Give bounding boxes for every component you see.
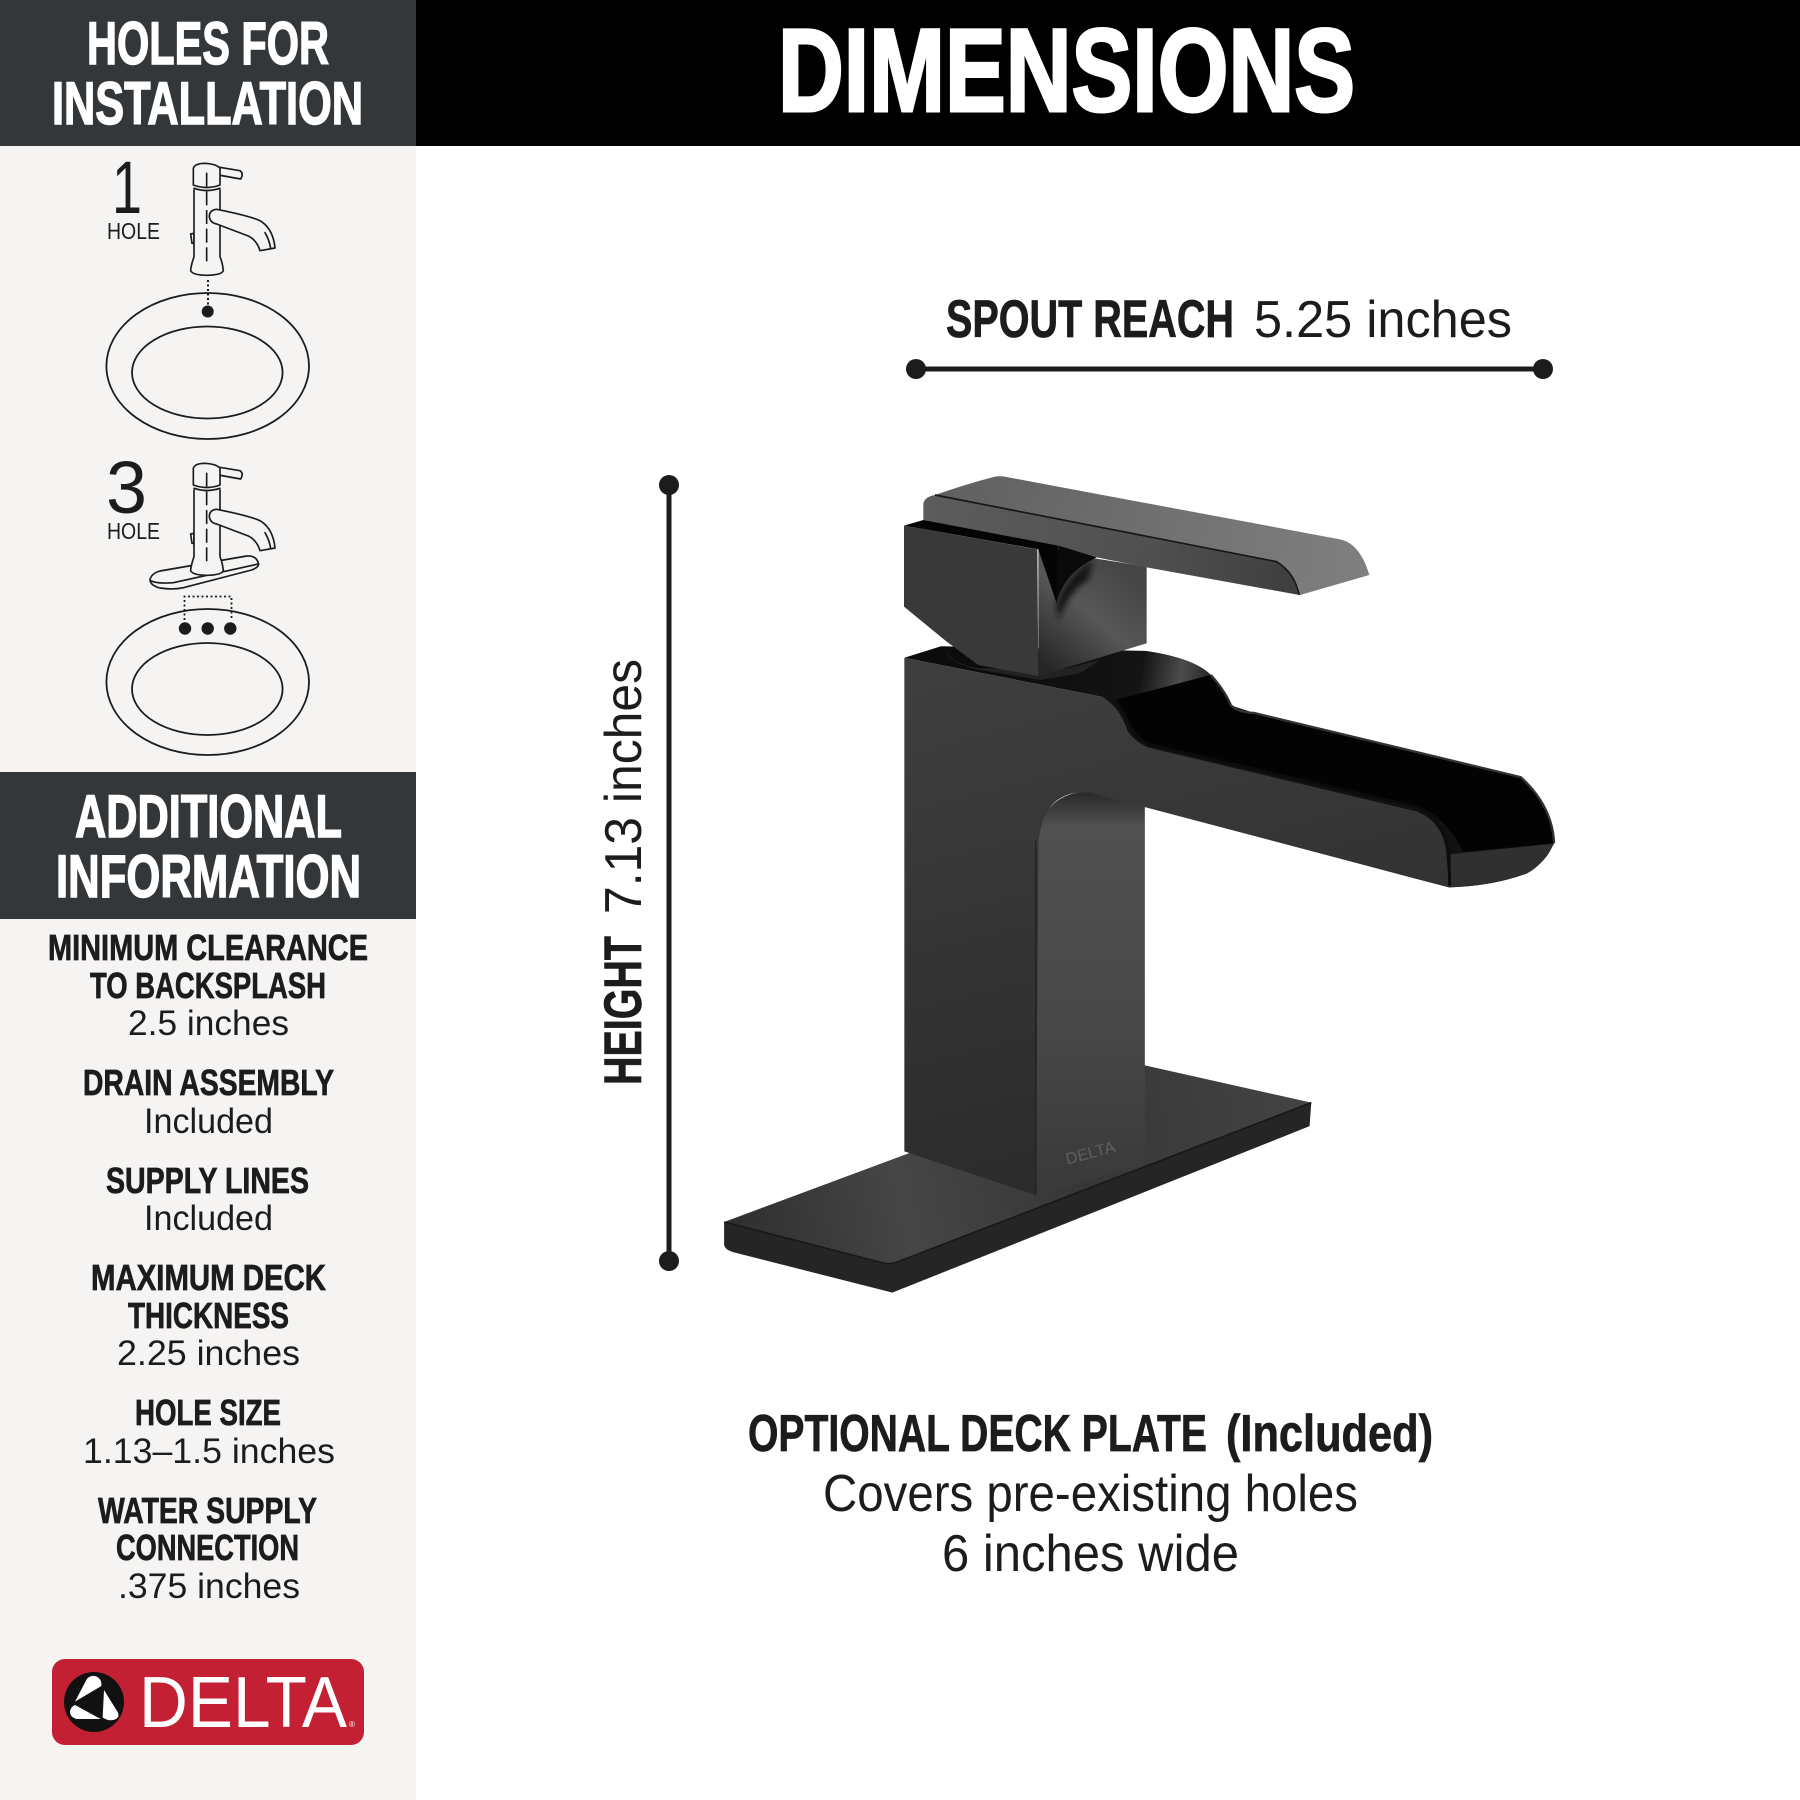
spec: water supply connection: CONNECTION <box>116 1527 299 1568</box>
callout: optional deck plate: Covers pre-existing holes <box>823 1465 1358 1523</box>
dotted guide bracket <box>184 596 232 620</box>
icon: single-handle faucet on plate <box>191 463 275 575</box>
spec: hole size <box>83 1392 335 1471</box>
callout: optional deck plate: OPTIONAL DECK PLATE <box>748 1405 1207 1463</box>
title bar: dimensions <box>416 0 1800 146</box>
spec: drain assembly: DRAIN ASSEMBLY <box>83 1062 334 1103</box>
number 1: 1 <box>112 146 142 229</box>
illustration: black faucet with deck plate <box>724 476 1554 1293</box>
spec: water supply connection: .375 inches <box>118 1567 300 1606</box>
spec: minimum clearance to backsplash: 2.5 inches <box>128 1004 289 1043</box>
deck plate <box>724 1065 1311 1293</box>
spec: hole size: 1.13–1.5 inches <box>83 1432 335 1471</box>
header: additional information: ADDITIONAL <box>75 783 342 850</box>
logo: delta <box>52 1659 364 1745</box>
icon: deck plate <box>150 556 259 589</box>
panel: left sidebar <box>0 0 416 1800</box>
logo: delta: ® <box>349 1720 355 1729</box>
spec: supply lines: Included <box>144 1199 273 1238</box>
logo: delta: DELTA <box>139 1663 347 1743</box>
arrow: height span <box>659 475 679 1271</box>
spec: minimum clearance to backsplash: TO BACKSPLASH <box>90 965 326 1006</box>
spec: maximum deck thickness: THICKNESS <box>128 1295 289 1336</box>
callout: height: HEIGHT <box>594 936 653 1085</box>
callout: spout reach: SPOUT REACH <box>946 290 1234 349</box>
number 3: 3 <box>106 446 147 529</box>
spec: maximum deck thickness <box>91 1257 326 1373</box>
header: holes for installation <box>0 0 416 146</box>
callout: height: 7.13 inches <box>595 659 653 914</box>
icon: single-handle faucet <box>191 163 275 275</box>
callout: optional deck plate <box>748 1405 1433 1583</box>
callout: optional deck plate: 6 inches wide <box>942 1525 1239 1583</box>
callout: height <box>594 475 679 1271</box>
spec: supply lines <box>106 1160 309 1238</box>
header: additional information <box>0 772 416 919</box>
spec: maximum deck thickness: MAXIMUM DECK <box>91 1257 326 1298</box>
icon: sink with one hole <box>106 293 309 439</box>
label: hole: HOLE <box>107 518 160 544</box>
spec: water supply connection: WATER SUPPLY <box>98 1490 317 1531</box>
engraved brand mark: DELTA <box>1064 1138 1117 1168</box>
spec: minimum clearance to backsplash: MINIMUM CLEARANCE <box>48 927 368 968</box>
icon group: 1 hole installation <box>106 146 309 439</box>
icon: sink with three holes <box>106 609 309 755</box>
callout: optional deck plate: (Included) <box>1226 1405 1433 1463</box>
spec: drain assembly: Included <box>144 1102 273 1141</box>
callout: spout reach: 5.25 inches <box>1254 291 1512 349</box>
label: hole: HOLE <box>107 218 160 244</box>
callout: spout reach <box>906 290 1553 379</box>
dotted guide line <box>207 280 209 305</box>
spec: supply lines: SUPPLY LINES <box>106 1160 309 1201</box>
spec: maximum deck thickness: 2.25 inches <box>117 1334 300 1373</box>
spec: minimum clearance to backsplash <box>48 927 368 1043</box>
arrow: spout reach span <box>906 359 1553 379</box>
faucet handle and lever <box>904 476 1369 680</box>
header: holes for installation: INSTALLATION <box>52 70 363 137</box>
spec: water supply connection <box>98 1490 317 1606</box>
header: holes for installation: HOLES FOR <box>87 10 329 77</box>
header: additional information: INFORMATION <box>56 843 361 910</box>
title bar: dimensions: DIMENSIONS <box>778 5 1355 137</box>
faucet body and spout <box>904 646 1554 1196</box>
icon group: 3 hole installation <box>106 446 309 755</box>
spec: hole size: HOLE SIZE <box>135 1392 281 1433</box>
spec: drain assembly <box>83 1062 334 1141</box>
